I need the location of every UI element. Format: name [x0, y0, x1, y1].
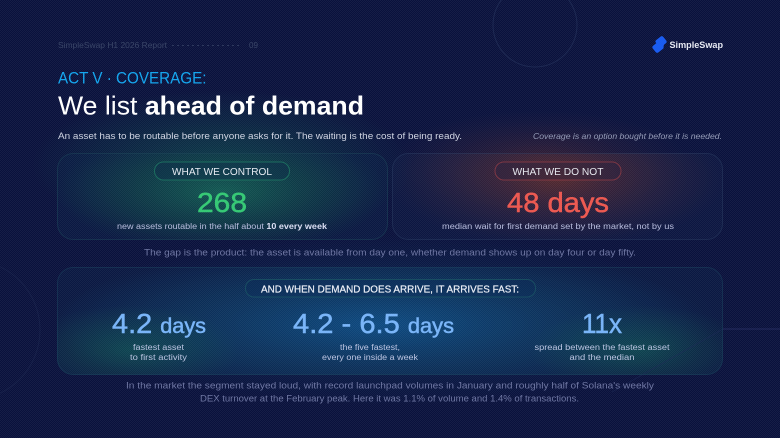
stat: five fastest: 4.2 - 6.5 days [293, 308, 454, 339]
caption: five fastest: every one inside a week [322, 353, 419, 362]
report header: 09 [249, 40, 258, 50]
bridge text: The gap is the product: the asset is available from day one, whether demand shows up on day four or day fifty. [144, 248, 636, 258]
eyebrow: ACT V · COVERAGE: [58, 70, 206, 88]
stat: fastest asset: 4.2 days [112, 308, 206, 339]
caption: fastest asset: to first activity [130, 353, 187, 362]
stat: fastest asset [112, 308, 206, 362]
panel: and when demand does arrive [58, 268, 722, 374]
closing text: DEX turnover at the February peak. Here it was 1.1% of volume and 1.4% of transactions. [200, 394, 579, 404]
panel: what we do not [392, 154, 722, 240]
title: We list ahead of demand [58, 90, 364, 120]
stat: 48 days: 48 days [507, 187, 609, 218]
subtitle: An asset has to be routable before anyone asks for it. The waiting is the cost of being ready. [58, 131, 462, 142]
icon: simpleswap mark [652, 35, 667, 54]
side note: Coverage is an option bought before it is needed. [533, 131, 722, 141]
stat: spread [534, 308, 670, 362]
background glows [57, 104, 723, 378]
report header [58, 40, 258, 50]
pill: what we do not: WHAT WE DO NOT [512, 166, 604, 178]
pill: what we control [154, 162, 290, 180]
logo [652, 35, 723, 54]
closing text [126, 380, 655, 404]
closing text: In the market the segment stayed loud, with record launchpad volumes in January and roughly half of Solana's weekly [126, 380, 655, 390]
panel: what we control [58, 154, 388, 240]
caption: fastest asset: fastest asset [133, 343, 185, 352]
stat: spread: 11x [582, 308, 622, 339]
pill: what we do not [495, 162, 621, 180]
caption: five fastest: the five fastest, [340, 343, 400, 352]
caption: spread: spread between the fastest asset [534, 343, 670, 352]
pill: and when demand does arrive [246, 280, 536, 297]
caption: median wait: median wait for first demand set by the market, not by us [442, 222, 674, 231]
caption: spread: and the median [570, 353, 634, 362]
logo: SimpleSwap [670, 40, 723, 51]
pill: and when demand does arrive: AND WHEN DEMAND DOES ARRIVE, IT ARRIVES FAST: [261, 284, 519, 296]
caption: new assets: new assets routable in the half about 10 every week [117, 222, 328, 231]
report header: SimpleSwap H1 2026 Report [58, 40, 168, 50]
pill: what we control: WHAT WE CONTROL [172, 166, 272, 178]
stat: five fastest [293, 308, 454, 362]
stat: 268: 268 [197, 187, 247, 218]
